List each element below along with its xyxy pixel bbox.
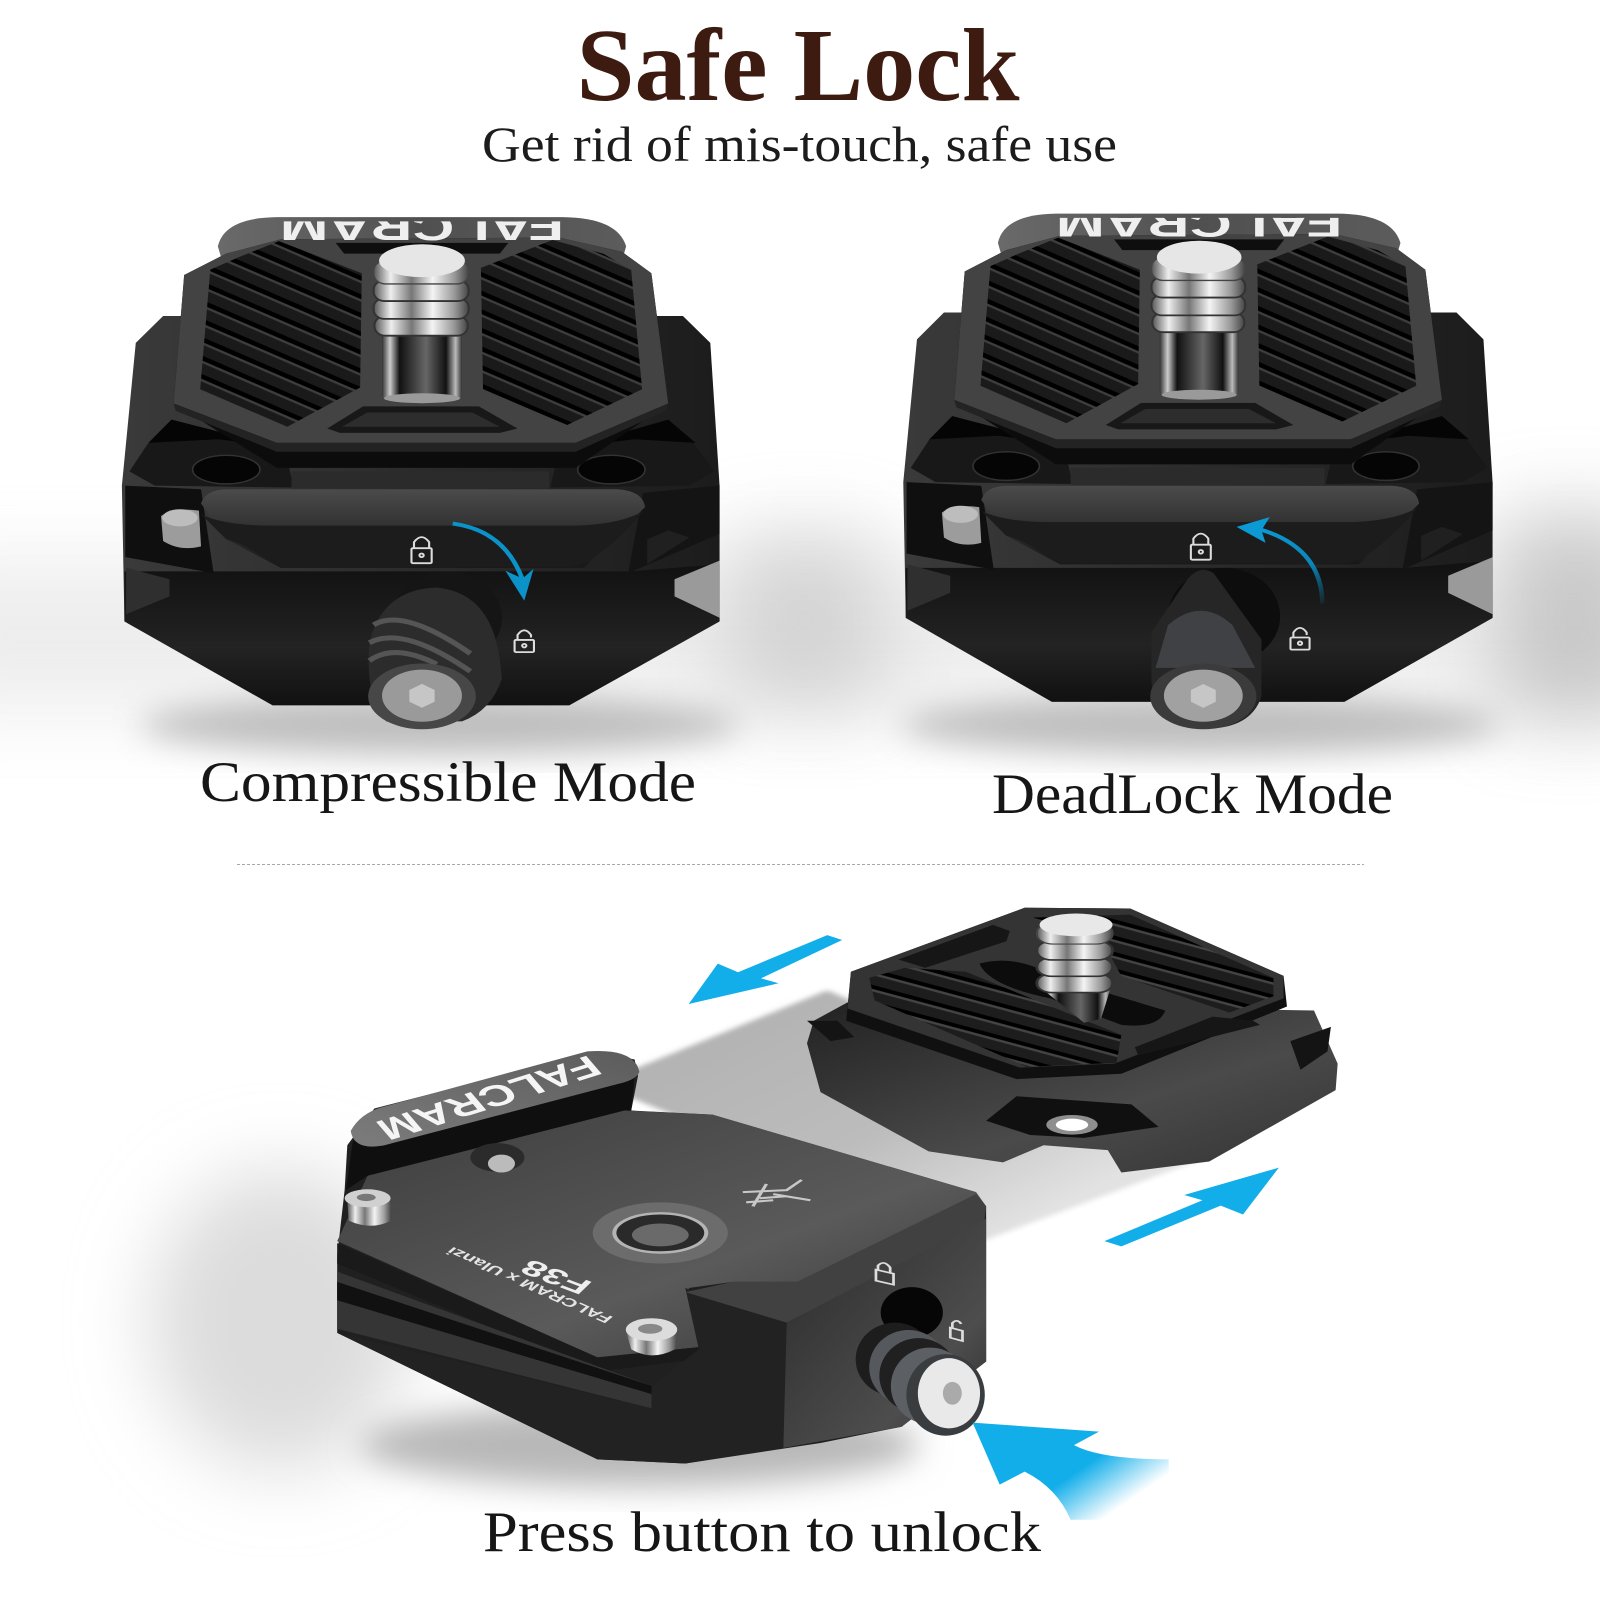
- knob: deadlock position: [1150, 568, 1280, 729]
- title: Safe Lock: [576, 8, 1020, 123]
- icon: closed lock: [411, 537, 432, 563]
- bolt front: [626, 1318, 677, 1355]
- icon: open lock: [950, 1321, 962, 1341]
- motion blur band: [597, 990, 1206, 1241]
- arrow: slide right: [1104, 1168, 1279, 1246]
- divider: [237, 864, 1364, 866]
- icon: open lock: [515, 630, 534, 652]
- brand tab text: FALCRAM: [1056, 203, 1342, 243]
- mounting screw: [1037, 913, 1113, 1023]
- rear tab bolt: [470, 1143, 524, 1173]
- subtitle: Get rid of mis-touch, safe use: [482, 116, 1117, 172]
- model text F38: F38: [515, 1255, 598, 1298]
- icon: closed lock: [876, 1263, 894, 1285]
- center screw hole: [593, 1202, 728, 1264]
- engraved signature mark: [743, 1180, 810, 1206]
- knob: compressible position: [368, 571, 502, 729]
- label: deadlock mode: DeadLock Mode: [992, 763, 1393, 826]
- icon: open lock: [1290, 628, 1310, 650]
- arrow: rotate up: [1237, 517, 1322, 604]
- arrow: rotate down: [453, 524, 534, 601]
- brand tab text: FALCRAM: [280, 207, 564, 246]
- exploded view: plate sliding into clamp: [337, 908, 1338, 1520]
- arrow: slide left: [689, 935, 842, 1004]
- arrow: press button: [973, 1423, 1169, 1520]
- product: compressible mode clamp: [122, 207, 720, 729]
- background floor shadows: [0, 510, 1600, 1487]
- icon: closed lock: [1191, 534, 1211, 560]
- bolt left: [345, 1189, 391, 1226]
- knob: push button: [856, 1287, 985, 1436]
- brand tab text: FALCRAM: [368, 1049, 609, 1146]
- label: press button: Press button to unlock: [483, 1501, 1042, 1564]
- product: deadlock mode clamp: [903, 203, 1493, 729]
- brand line: FALCRAM x Ulanzi: [443, 1244, 617, 1325]
- top quick release plate: [807, 908, 1338, 1173]
- label: compressible mode: Compressible Mode: [200, 751, 696, 814]
- base clamp: [337, 1049, 986, 1463]
